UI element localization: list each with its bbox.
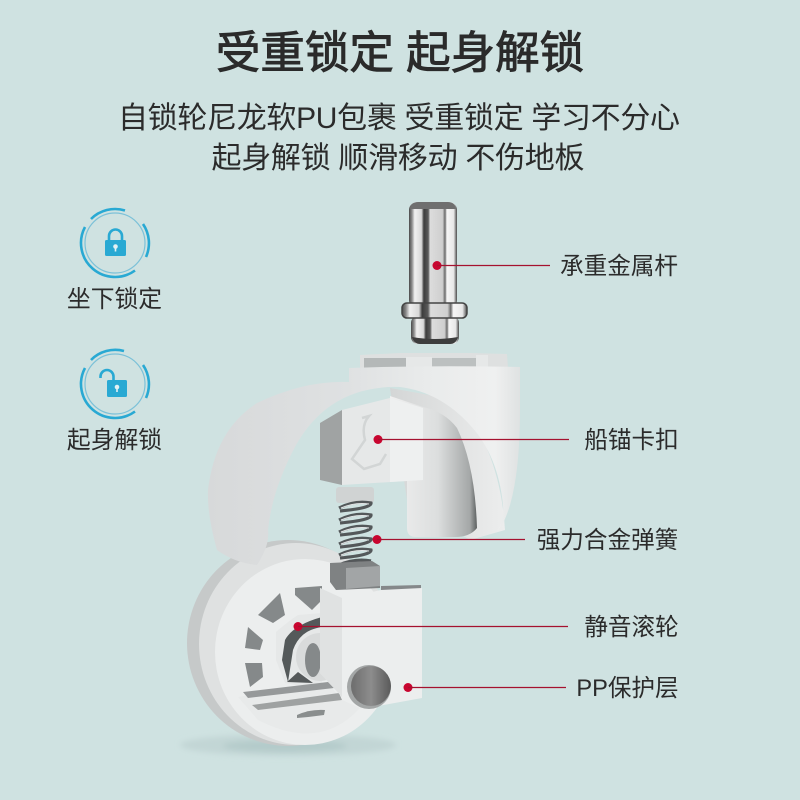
callout: PP protective layer	[404, 675, 679, 702]
lower bracket block	[320, 585, 422, 709]
label: stand up unlock: 起身解锁	[67, 427, 162, 454]
callout: alloy spring	[372, 527, 678, 554]
callout: anchor clip	[374, 427, 679, 454]
callout: PP protective layer: PP保护层	[576, 675, 679, 702]
callout: silent roller: 静音滚轮	[584, 614, 679, 641]
label: sit down lock: 坐下锁定	[67, 286, 162, 313]
icon: unlocked padlock	[81, 350, 149, 418]
wheel bracket plate	[238, 682, 360, 733]
fork arm and body	[208, 366, 520, 565]
fork inner arch	[390, 388, 505, 540]
rear column	[390, 396, 477, 537]
wheel gear	[276, 613, 322, 690]
square plunger	[330, 561, 380, 590]
callout: alloy spring: 强力合金弹簧	[537, 527, 678, 554]
metal pin	[402, 202, 467, 344]
spring	[339, 502, 371, 565]
callout: anchor clip: 船锚卡扣	[584, 427, 679, 454]
fork top cap	[360, 353, 508, 368]
title: 受重锁定 起身解锁	[216, 29, 584, 78]
callout: metal rod	[432, 253, 678, 280]
icon: locked padlock	[81, 209, 149, 277]
caster wheel	[187, 540, 395, 746]
floor shadow	[180, 734, 396, 756]
spring cap	[336, 487, 374, 503]
callout: silent roller	[294, 614, 679, 641]
callout: metal rod: 承重金属杆	[560, 253, 678, 280]
subtitle text block: 自锁轮尼龙软PU包裹 受重锁定 学习不分心	[118, 102, 680, 135]
subtitle text block: 起身解锁 顺滑移动 不伤地板	[212, 142, 584, 175]
anchor clip block	[320, 398, 423, 485]
subtitle text block	[118, 102, 680, 175]
wheel spoke windows	[245, 586, 322, 687]
